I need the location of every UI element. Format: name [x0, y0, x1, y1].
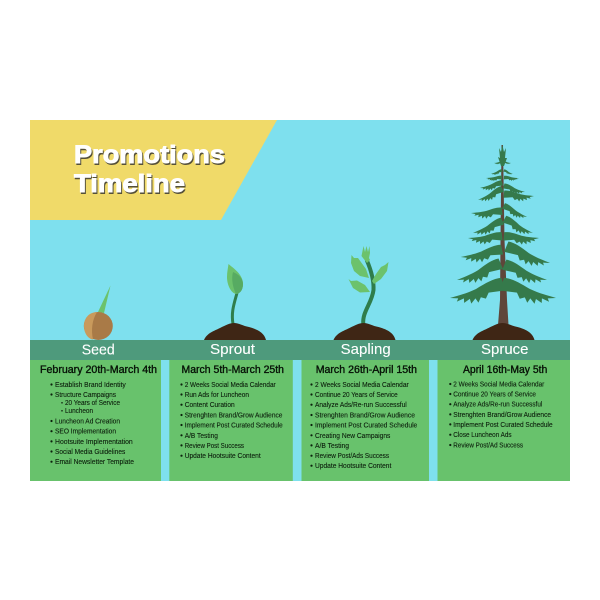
task list: seed: Hootsuite Implementation — [55, 437, 133, 446]
task list: sprout: Update Hootsuite Content — [185, 451, 261, 460]
illustration: spruce tree — [449, 145, 557, 340]
title: Timeline — [74, 170, 185, 198]
task list: sapling: Strenghten Brand/Grow Audience — [315, 410, 415, 420]
task list: seed: Social Media Guidelines — [55, 447, 125, 456]
task list: spruce: Continue 20 Years of Service — [453, 390, 536, 398]
panel: spruce tasks — [438, 360, 570, 481]
title: Timeline — [75, 172, 186, 200]
date heading: spruce: April 16th-May 5th — [463, 364, 547, 376]
task list: sprout: 2 Weeks Social Media Calendar — [185, 380, 276, 389]
task list: spruce: Close Luncheon Ads — [453, 430, 512, 439]
task list: sprout: Content Curation — [185, 400, 235, 409]
task list: seed: Luncheon Ad Creation — [55, 416, 120, 426]
task list: sapling: A/B Testing — [315, 441, 349, 450]
task list: sprout: Review Post Success — [185, 441, 244, 450]
task list: spruce: Strenghten Brand/Grow Audience — [453, 410, 551, 419]
task list: seed — [50, 380, 134, 466]
task list: seed: Establish Brand Identity — [55, 380, 126, 389]
date heading: sprout: March 5th-March 25th — [182, 364, 284, 376]
task list: sapling: Analyze Ads/Re-run Successful — [315, 400, 407, 409]
date heading: sapling: March 26th-April 15th — [316, 364, 417, 376]
stage label: Spruce: Spruce — [481, 342, 528, 358]
task list: spruce: Review Post/Ad Success — [453, 440, 523, 450]
task list: seed: 20 Years of Service — [65, 398, 120, 407]
stage label: Sapling: Sapling — [341, 342, 391, 358]
illustration: seed — [84, 286, 113, 340]
task list: sprout: Run Ads for Luncheon — [185, 390, 249, 399]
task list: sprout: Implement Post Curated Schedule — [185, 420, 283, 430]
task list: spruce: 2 Weeks Social Media Calendar — [453, 380, 545, 388]
illustration: sprout — [204, 264, 266, 340]
task list: sapling: Review Post/Ads Success — [315, 451, 389, 460]
sky background — [30, 120, 570, 481]
stage label band — [30, 340, 570, 360]
task list: sapling: Implement Post Curated Schedule — [315, 420, 417, 430]
task list: sapling: Continue 20 Years of Service — [315, 390, 398, 399]
task list: spruce: Implement Post Curated Schedule — [453, 420, 553, 429]
stage label: Seed: Seed — [82, 342, 115, 358]
task list: sprout: A/B Testing — [185, 431, 218, 440]
illustration: sapling — [334, 246, 396, 340]
task list: sprout — [180, 380, 283, 460]
panel: seed tasks — [30, 360, 161, 481]
panel: sapling tasks — [302, 360, 429, 481]
task list: spruce: Analyze Ads/Re-run Successful — [453, 400, 543, 409]
title: Promotions — [74, 141, 225, 169]
task list: sprout: Strenghten Brand/Grow Audience — [185, 410, 282, 420]
title — [74, 141, 226, 200]
task list: sapling: Update Hootsuite Content — [315, 461, 392, 470]
task list: seed: Email Newsletter Template — [55, 457, 134, 466]
task list: seed: Structure Campaigns — [55, 390, 116, 399]
task list: sapling: 2 Weeks Social Media Calendar — [315, 380, 409, 389]
task list: sapling — [310, 380, 417, 470]
task list: seed: Luncheon — [65, 406, 93, 415]
stage label: Sprout: Sprout — [210, 342, 255, 358]
title: Promotions — [75, 142, 226, 170]
date heading: seed: February 20th-March 4th — [40, 364, 157, 376]
title banner — [30, 120, 277, 220]
task list: spruce — [449, 380, 553, 450]
task list: sapling: Creating New Campaigns — [315, 431, 390, 440]
task list: seed: SEO Implementation — [55, 427, 116, 436]
panel: sprout tasks — [169, 360, 293, 481]
